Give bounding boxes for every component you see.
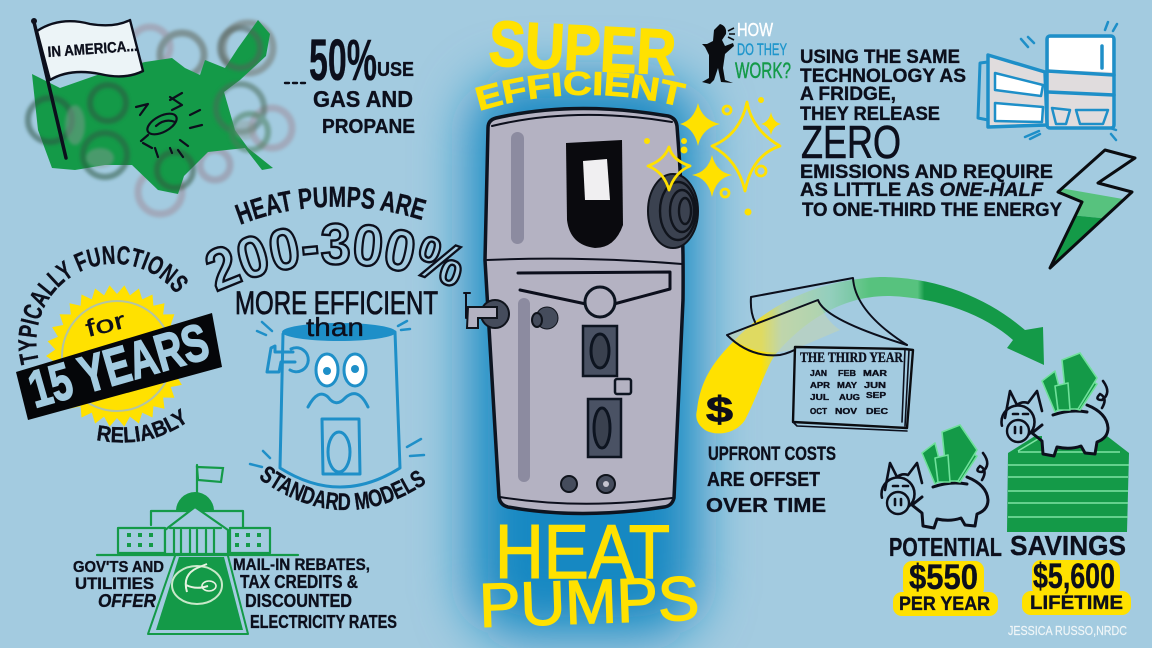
flag bbox=[31, 18, 143, 158]
callout: $5,600 lifetime: $5,600 bbox=[1033, 557, 1115, 596]
heading: super efficient bbox=[475, 7, 686, 111]
heading: heat pumps: HEAT bbox=[495, 510, 670, 595]
icon: heat pump water heater bbox=[464, 108, 698, 514]
text block: govts and utilities offer: UTILITIES bbox=[75, 574, 154, 593]
text block: govts and utilities offer: OFFER bbox=[98, 591, 156, 611]
icon: sparkles bbox=[644, 97, 781, 216]
switches bbox=[583, 326, 617, 376]
callout: how do they work bbox=[702, 20, 791, 84]
front panel bbox=[518, 272, 670, 304]
text block: 50% use gas and propane bbox=[285, 28, 415, 138]
badge: typically functions for 15 years reliably: for bbox=[83, 307, 128, 343]
icon: government building bbox=[97, 465, 298, 634]
text block: rebates: MAIL-IN REBATES, bbox=[233, 555, 370, 574]
calendar pages bbox=[751, 278, 907, 345]
text block: upfront costs: OVER TIME bbox=[706, 495, 826, 517]
text block: using the same technology: TECHNOLOGY AS bbox=[800, 66, 966, 87]
callout: $5,600 lifetime: LIFETIME bbox=[1030, 593, 1123, 614]
icon: calendar: JAN bbox=[810, 369, 827, 378]
banner bbox=[16, 313, 222, 420]
map grey overlays bbox=[65, 105, 255, 168]
badge: typically functions for 15 years reliably: RELIABLY bbox=[97, 408, 186, 443]
map rings behind bbox=[130, 23, 292, 214]
text block: govts and utilities offer bbox=[73, 559, 164, 611]
heading: potential savings bbox=[889, 530, 1126, 562]
icon: calendar: NOV bbox=[835, 407, 858, 416]
map rings over bbox=[28, 28, 268, 188]
icon: dollar sign: $ bbox=[706, 389, 733, 430]
icon: piggy bank on stack bbox=[1002, 353, 1108, 456]
heading: heat pumps are 200-300% more efficient than: MORE EFFICIENT bbox=[235, 285, 438, 321]
text block: 50% use gas and propane: GAS AND bbox=[313, 86, 413, 112]
text block: 50% use gas and propane: USE bbox=[377, 59, 414, 81]
icon: person bbox=[702, 24, 734, 84]
heading: super efficient: EFFICIENT bbox=[475, 71, 686, 111]
text block: using the same technology: EMISSIONS AND REQUIRE bbox=[800, 162, 1053, 183]
badge: typically functions for 15 years reliably: TYPICALLY FUNCTIONS bbox=[18, 246, 188, 366]
callout: how do they work: HOW bbox=[737, 20, 773, 40]
flag text: IN AMERICA... bbox=[47, 38, 138, 61]
icon: fridge bbox=[978, 22, 1117, 140]
callout: how do they work: DO THEY bbox=[737, 40, 787, 59]
callout: $550 per year: $550 bbox=[909, 558, 978, 597]
label: standard models: STANDARD MODELS bbox=[260, 466, 425, 510]
panel: America map bbox=[28, 18, 292, 214]
heading: potential savings: POTENTIAL bbox=[889, 532, 1002, 562]
fan bbox=[648, 174, 698, 248]
text block: rebates: DISCOUNTED bbox=[245, 591, 352, 611]
icon: calendar: FEB bbox=[838, 369, 856, 378]
control panel bbox=[566, 140, 623, 248]
text block: upfront costs bbox=[706, 444, 836, 517]
icon: lightning bolt bbox=[1048, 148, 1136, 270]
icon: calendar: DEC bbox=[866, 407, 888, 416]
map flame marks bbox=[136, 93, 202, 157]
faucet bbox=[481, 300, 509, 328]
callout: $550 per year bbox=[893, 558, 998, 616]
heading: heat pumps are 200-300% more efficient than: than bbox=[306, 312, 364, 342]
text block: using the same technology: TO ONE-THIRD THE ENERGY bbox=[802, 200, 1062, 221]
icon: piggy bank with money bbox=[882, 425, 988, 528]
badge: typically functions for 15 years reliably: 15 YEARS bbox=[22, 313, 215, 420]
central blue glow bbox=[470, 80, 698, 635]
icon: calendar bbox=[727, 278, 913, 431]
heading: heat pumps are 200-300% more efficient than: 200-300% bbox=[205, 222, 464, 292]
icon: calendar: AUG bbox=[839, 393, 860, 402]
text block: using the same technology: THEY RELEASE bbox=[800, 104, 940, 125]
heading: heat pumps bbox=[478, 510, 700, 641]
text block: rebates bbox=[233, 555, 397, 632]
text block: using the same technology: AS LITTLE AS ONE-HALF bbox=[800, 180, 1044, 201]
icon: calendar: JUL bbox=[810, 393, 829, 402]
callout: how do they work: WORK? bbox=[735, 58, 791, 83]
path with rebate bbox=[148, 556, 248, 634]
icon: calendar: APR bbox=[810, 381, 830, 390]
icon: standard water heater bbox=[250, 321, 424, 487]
callout: $550 per year: PER YEAR bbox=[899, 594, 990, 615]
text block: govts and utilities offer: GOV'TS AND bbox=[73, 559, 164, 576]
map shape bbox=[32, 20, 273, 194]
icon: calendar: MAR bbox=[863, 369, 887, 378]
credit: JESSICA RUSSO,NRDC bbox=[1008, 624, 1127, 638]
heading: potential savings: SAVINGS bbox=[1010, 530, 1126, 561]
icon: calendar: THE THIRD YEAR bbox=[800, 350, 903, 366]
text block: rebates: ELECTRICITY RATES bbox=[250, 612, 397, 632]
icon: calendar: MAY bbox=[837, 381, 858, 390]
icon: calendar: JUN bbox=[864, 381, 886, 390]
heading: heat pumps are 200-300% more efficient than bbox=[205, 186, 464, 342]
sun gear bbox=[46, 285, 188, 427]
text block: using the same technology: ZERO bbox=[801, 116, 901, 168]
icon: calendar: SEP bbox=[866, 391, 887, 400]
text block: using the same technology: A FRIDGE, bbox=[800, 84, 896, 105]
text block: rebates: TAX CREDITS & bbox=[240, 572, 358, 592]
text block: upfront costs: ARE OFFSET bbox=[707, 469, 820, 491]
callout: $5,600 lifetime bbox=[1022, 557, 1131, 615]
heading: super efficient: SUPER bbox=[487, 7, 678, 89]
icon: stack of money bbox=[1007, 436, 1129, 532]
text block: upfront costs: UPFRONT COSTS bbox=[708, 444, 836, 465]
text block: 50% use gas and propane: 50% bbox=[309, 28, 377, 93]
badge: typically functions for 15 years reliably bbox=[16, 246, 222, 443]
arrow: upfront costs to savings bbox=[696, 277, 1044, 433]
text block: 50% use gas and propane: PROPANE bbox=[322, 116, 415, 138]
heading: heat pumps are 200-300% more efficient than: HEAT PUMPS ARE bbox=[234, 186, 427, 225]
text block: using the same technology bbox=[800, 47, 1062, 221]
text block: using the same technology: USING THE SAME bbox=[800, 47, 960, 68]
icon: calendar: OCT bbox=[810, 407, 827, 416]
heading: heat pumps: PUMPS bbox=[478, 564, 700, 641]
